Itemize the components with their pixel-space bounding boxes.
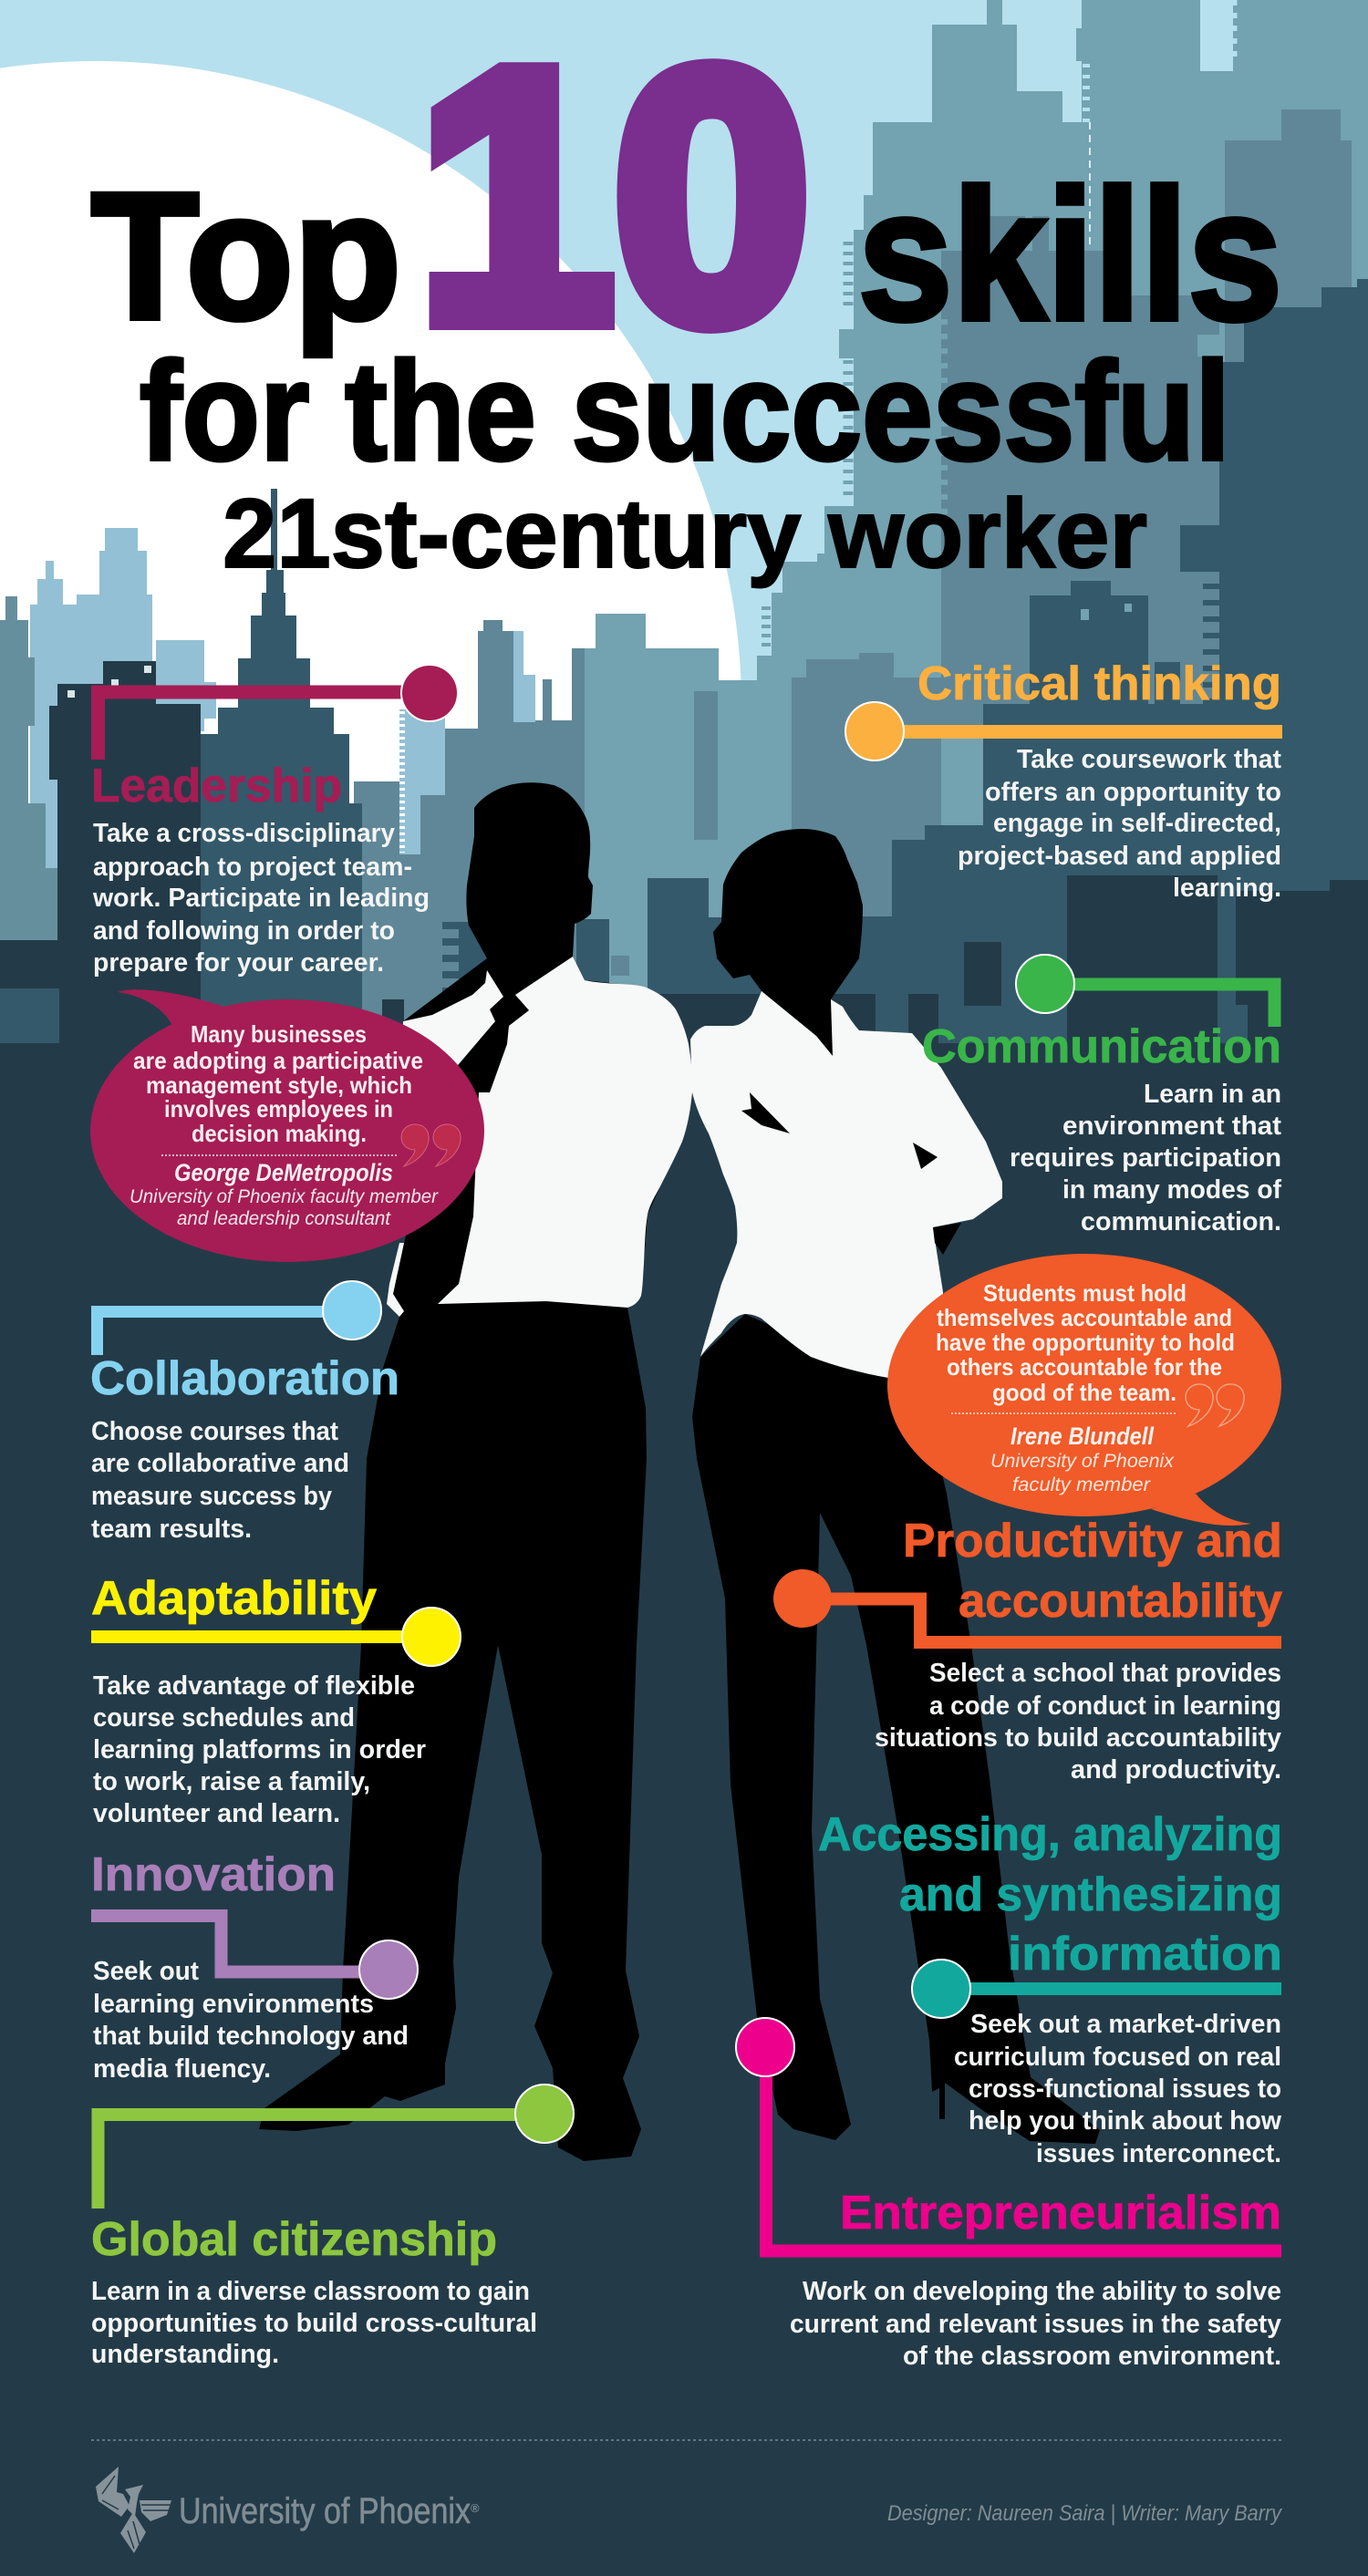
skill: Collaboration: team results. bbox=[91, 1515, 252, 1544]
skill: Entrepreneurialism: of the classroom environment. bbox=[903, 2342, 1281, 2371]
skill: Innovation: media fluency. bbox=[93, 2054, 271, 2084]
skill: Accessing, analyzing and synthesizing information: and synthesizing bbox=[899, 1868, 1282, 1921]
skill: Accessing, analyzing and synthesizing information: cross-functional issues to bbox=[969, 2074, 1281, 2104]
man shirt bbox=[438, 957, 692, 1308]
man shirt left sleeve bbox=[401, 970, 503, 1122]
skill: Collaboration: are collaborative and bbox=[91, 1449, 349, 1478]
skill: Accessing, analyzing and synthesizing information: curriculum focused on real bbox=[954, 2043, 1281, 2072]
skill: Accessing, analyzing and synthesizing information: Seek out a market-driven bbox=[970, 2010, 1281, 2039]
skill: Communication: environment that bbox=[1062, 1112, 1281, 1141]
skill: Communication: requires participation bbox=[1010, 1143, 1281, 1173]
skill: Accessing, analyzing and synthesizing information bbox=[818, 1808, 1282, 2168]
skill: Communication bbox=[922, 955, 1281, 1236]
skill: Entrepreneurialism: Entrepreneurialism bbox=[840, 2187, 1281, 2240]
title: skills bbox=[858, 151, 1282, 359]
skill: Critical thinking: Take coursework that bbox=[1017, 745, 1281, 774]
skill: Productivity and accountability: situations to build accountability bbox=[875, 1723, 1281, 1753]
skill: Leadership: work. Participate in leading bbox=[92, 884, 430, 913]
quote bubble: George DeMetropolis: involves employees in bbox=[164, 1095, 393, 1122]
skill: Critical thinking bbox=[845, 657, 1282, 903]
skill: Leadership: approach to project team- bbox=[93, 853, 412, 882]
skill: Adaptability: course schedules and bbox=[93, 1703, 355, 1733]
quote bubble: George DeMetropolis: management style, which bbox=[146, 1071, 412, 1099]
woman hand bbox=[933, 1223, 961, 1255]
footer: ® bbox=[471, 2501, 480, 2515]
skill: Communication: Communication bbox=[922, 1020, 1281, 1073]
skill: Innovation: that build technology and bbox=[93, 2022, 409, 2051]
skill: Communication: in many modes of bbox=[1062, 1175, 1281, 1205]
skill: Critical thinking: engage in self-directed, bbox=[993, 809, 1281, 838]
quote bubble: George DeMetropolis: Many businesses bbox=[191, 1020, 367, 1048]
woman arm shadow bbox=[741, 1092, 790, 1133]
skill: Collaboration: Choose courses that bbox=[91, 1417, 338, 1446]
woman trousers bbox=[692, 1314, 1100, 2144]
skill: Entrepreneurialism: Work on developing the ability to solve bbox=[803, 2277, 1281, 2306]
icon: phoenix logo bbox=[96, 2467, 171, 2553]
man lower arm bbox=[387, 1243, 404, 1317]
quote bubble: George DeMetropolis: and leadership consultant bbox=[177, 1208, 391, 1229]
skill: Productivity and accountability: accountability bbox=[959, 1575, 1282, 1628]
quote bubble: Irene Blundell: faculty member bbox=[1012, 1474, 1151, 1495]
title: 10 bbox=[418, 0, 810, 396]
quote bubble: Irene Blundell: good of the team. bbox=[992, 1379, 1176, 1406]
footer bbox=[96, 2467, 1283, 2553]
quotation marks bbox=[401, 1124, 461, 1166]
skill: Entrepreneurialism bbox=[736, 2018, 1281, 2371]
skill: Adaptability: Adaptability bbox=[91, 1572, 377, 1625]
quote bubble: Irene Blundell: others accountable for the bbox=[947, 1353, 1222, 1381]
skill: Global citizenship bbox=[91, 2085, 574, 2369]
skill: Accessing, analyzing and synthesizing information: help you think about how bbox=[969, 2106, 1281, 2136]
moon bbox=[0, 61, 741, 1352]
quote bubble: George DeMetropolis bbox=[90, 989, 484, 1262]
skill: Adaptability: volunteer and learn. bbox=[93, 1799, 340, 1828]
skill: Productivity and accountability: a code of conduct in learning bbox=[929, 1691, 1281, 1721]
quotation marks bbox=[1186, 1384, 1244, 1426]
quote bubble: Irene Blundell: have the opportunity to hold bbox=[936, 1329, 1235, 1356]
skill: Global citizenship: Learn in a diverse classroom to gain bbox=[91, 2277, 530, 2306]
skill: Collaboration bbox=[90, 1281, 399, 1544]
silhouette: woman bbox=[690, 829, 1100, 2144]
skill: Accessing, analyzing and synthesizing information: Accessing, analyzing bbox=[818, 1808, 1282, 1861]
skill: Adaptability: learning platforms in order bbox=[93, 1735, 426, 1764]
skill: Productivity and accountability bbox=[773, 1515, 1282, 1785]
skill: Adaptability bbox=[91, 1572, 461, 1828]
title: Top bbox=[91, 155, 401, 357]
skill: Innovation: Innovation bbox=[91, 1848, 336, 1901]
skill: Collaboration: measure success by bbox=[91, 1482, 332, 1511]
skill: Global citizenship: understanding. bbox=[91, 2340, 279, 2369]
skill: Critical thinking: project-based and applied bbox=[958, 842, 1281, 871]
skill: Leadership: Take a cross-disciplinary bbox=[93, 819, 395, 848]
footer: University of Phoenix bbox=[179, 2491, 471, 2531]
skill: Productivity and accountability: and productivity. bbox=[1071, 1755, 1281, 1785]
skill: Communication: Learn in an bbox=[1144, 1080, 1281, 1109]
skill: Leadership bbox=[91, 665, 458, 978]
skill: Leadership: and following in order to bbox=[93, 916, 395, 946]
quote bubble: George DeMetropolis: decision making. bbox=[192, 1120, 367, 1147]
quote bubble: Irene Blundell: University of Phoenix bbox=[990, 1451, 1176, 1472]
title: for the successful bbox=[140, 333, 1230, 490]
title bbox=[91, 0, 1282, 588]
skill: Global citizenship: Global citizenship bbox=[91, 2213, 497, 2266]
skill: Innovation: Seek out bbox=[93, 1957, 199, 1986]
quote bubble: George DeMetropolis: George DeMetropolis bbox=[174, 1159, 393, 1186]
skill: Leadership: Leadership bbox=[91, 760, 342, 812]
woman shirt bbox=[690, 991, 1002, 1378]
title: 21st-century worker bbox=[223, 478, 1147, 588]
quote bubble: Irene Blundell: Students must hold bbox=[983, 1279, 1187, 1307]
skill: Productivity and accountability: Productivity and bbox=[903, 1515, 1282, 1567]
quote bubble: Irene Blundell: Irene Blundell bbox=[1010, 1422, 1154, 1450]
skill: Communication: communication. bbox=[1081, 1207, 1281, 1236]
skill: Critical thinking: offers an opportunity to bbox=[985, 778, 1281, 807]
silhouette: man bbox=[259, 782, 692, 2161]
skill: Global citizenship: opportunities to build cross-cultural bbox=[91, 2309, 537, 2338]
quote bubble: George DeMetropolis: University of Phoenix faculty member bbox=[130, 1186, 439, 1207]
woman cuff shadow bbox=[913, 1143, 938, 1169]
quote bubble: Irene Blundell: themselves accountable and bbox=[937, 1304, 1232, 1331]
skill: Adaptability: to work, raise a family, bbox=[93, 1767, 370, 1796]
skill: Accessing, analyzing and synthesizing information: information bbox=[1008, 1928, 1282, 1981]
skill: Entrepreneurialism: current and relevant issues in the safety bbox=[790, 2310, 1281, 2339]
footer: Designer: Naureen Saira | Writer: Mary Barry bbox=[887, 2501, 1283, 2526]
skill: Critical thinking: Critical thinking bbox=[917, 657, 1281, 710]
skill: Critical thinking: learning. bbox=[1173, 874, 1281, 903]
skill: Innovation bbox=[91, 1848, 418, 2084]
skill: Productivity and accountability: Select a school that provides bbox=[929, 1659, 1281, 1688]
skill: Leadership: prepare for your career. bbox=[93, 948, 384, 978]
skill: Adaptability: Take advantage of flexible bbox=[93, 1671, 415, 1701]
quote bubble: Irene Blundell bbox=[887, 1254, 1281, 1526]
skill: Innovation: learning environments bbox=[93, 1990, 374, 2019]
quote bubble: George DeMetropolis: are adopting a participative bbox=[133, 1047, 423, 1074]
skill: Collaboration: Collaboration bbox=[90, 1352, 399, 1405]
skill: Accessing, analyzing and synthesizing information: issues interconnect. bbox=[1036, 2139, 1281, 2168]
